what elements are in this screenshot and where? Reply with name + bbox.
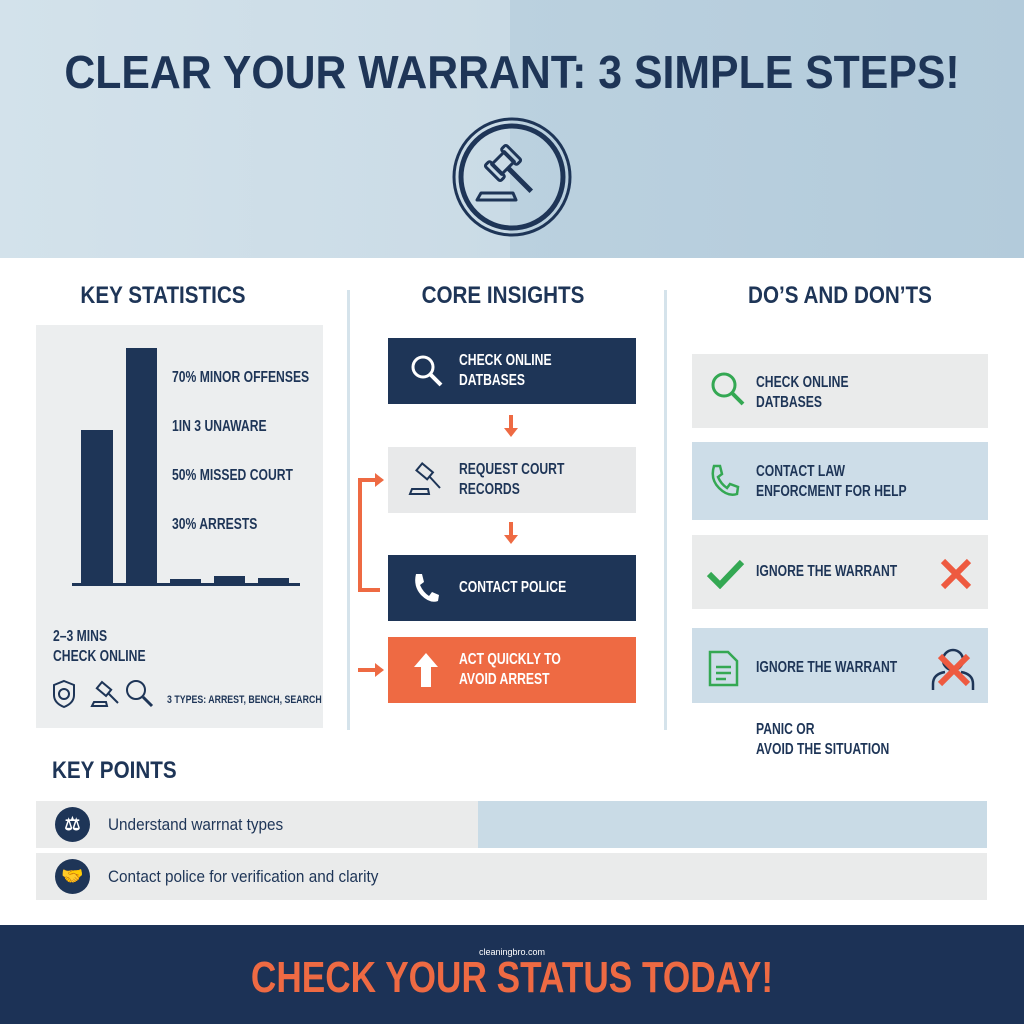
step 4: [388, 637, 636, 703]
step 1: CHECK ONLINE: [459, 352, 552, 369]
point 1: Understand warrnat types: [108, 815, 283, 834]
dont: ignore: [692, 535, 988, 609]
watermark: cleaningbro.com: [479, 947, 545, 957]
dont: ignore 2: [692, 628, 988, 703]
step 2: [388, 447, 636, 513]
dont: ignore 2: IGNORE THE WARRANT: [756, 659, 897, 676]
key points list: [36, 801, 987, 900]
header band: [0, 0, 1024, 258]
text: 2-3 mins: [53, 628, 146, 665]
stat labels: 70% MINOR OFFENSES: [172, 369, 309, 386]
step 4: AVOID ARREST: [459, 671, 550, 688]
text: panic: [756, 721, 889, 758]
do: check online: [692, 354, 988, 428]
text: 2-3 mins: 2–3 MINS: [53, 628, 107, 645]
do: contact law: ENFORCMENT FOR HELP: [756, 483, 907, 500]
point 2: [36, 853, 987, 900]
heading: key statistics: KEY STATISTICS: [80, 282, 246, 309]
point 2: Contact police for verification and clarity: [108, 867, 378, 886]
stat labels: [172, 369, 309, 533]
step 3: CONTACT POLICE: [459, 579, 566, 596]
heading: dos and donts: DO’S AND DON’TS: [748, 282, 932, 309]
stat labels: 50% MISSED COURT: [172, 467, 293, 484]
step 1: DATBASES: [459, 372, 525, 389]
do: contact law: CONTACT LAW: [756, 463, 845, 480]
stat labels: 1IN 3 UNAWARE: [172, 418, 267, 435]
do: check online: DATBASES: [756, 394, 822, 411]
footer call to action: CHECK YOUR STATUS TODAY!: [251, 953, 773, 1002]
panel: key statistics: [36, 325, 323, 728]
do: contact law: [692, 442, 988, 520]
heading: key points: KEY POINTS: [52, 757, 177, 784]
step 1: [388, 338, 636, 404]
footer: [0, 925, 1024, 1024]
text: panic: PANIC OR: [756, 721, 815, 738]
icons row: [53, 680, 153, 708]
arrow down: [504, 522, 518, 544]
stat labels: 30% ARRESTS: [172, 516, 257, 533]
arrow down: [504, 415, 518, 437]
text: 2-3 mins: CHECK ONLINE: [53, 648, 146, 665]
text: panic: AVOID THE SITUATION: [756, 741, 889, 758]
heading: core insights: CORE INSIGHTS: [422, 282, 584, 309]
flow: core insights: [358, 338, 636, 703]
step 4: ACT QUICKLY TO: [459, 651, 561, 668]
point 1: ⚖: [64, 814, 81, 834]
loop arrows: [358, 473, 384, 677]
step 2: REQUEST COURT: [459, 461, 564, 478]
point 2: 🤝: [61, 866, 84, 886]
icon: gavel in circle: [452, 118, 572, 236]
text: 3 types: 3 TYPES: ARREST, BENCH, SEARCH: [167, 694, 322, 706]
divider: [347, 290, 350, 730]
dont: ignore: IGNORE THE WARRANT: [756, 563, 897, 580]
title: CLEAR YOUR WARRANT: 3 SIMPLE STEPS!: [64, 46, 960, 98]
panel: dos and donts: [692, 354, 988, 758]
step 2: RECORDS: [459, 481, 520, 498]
point 1: [36, 801, 987, 848]
do: check online: CHECK ONLINE: [756, 374, 849, 391]
bar chart: [72, 348, 300, 586]
step 3: [388, 555, 636, 621]
